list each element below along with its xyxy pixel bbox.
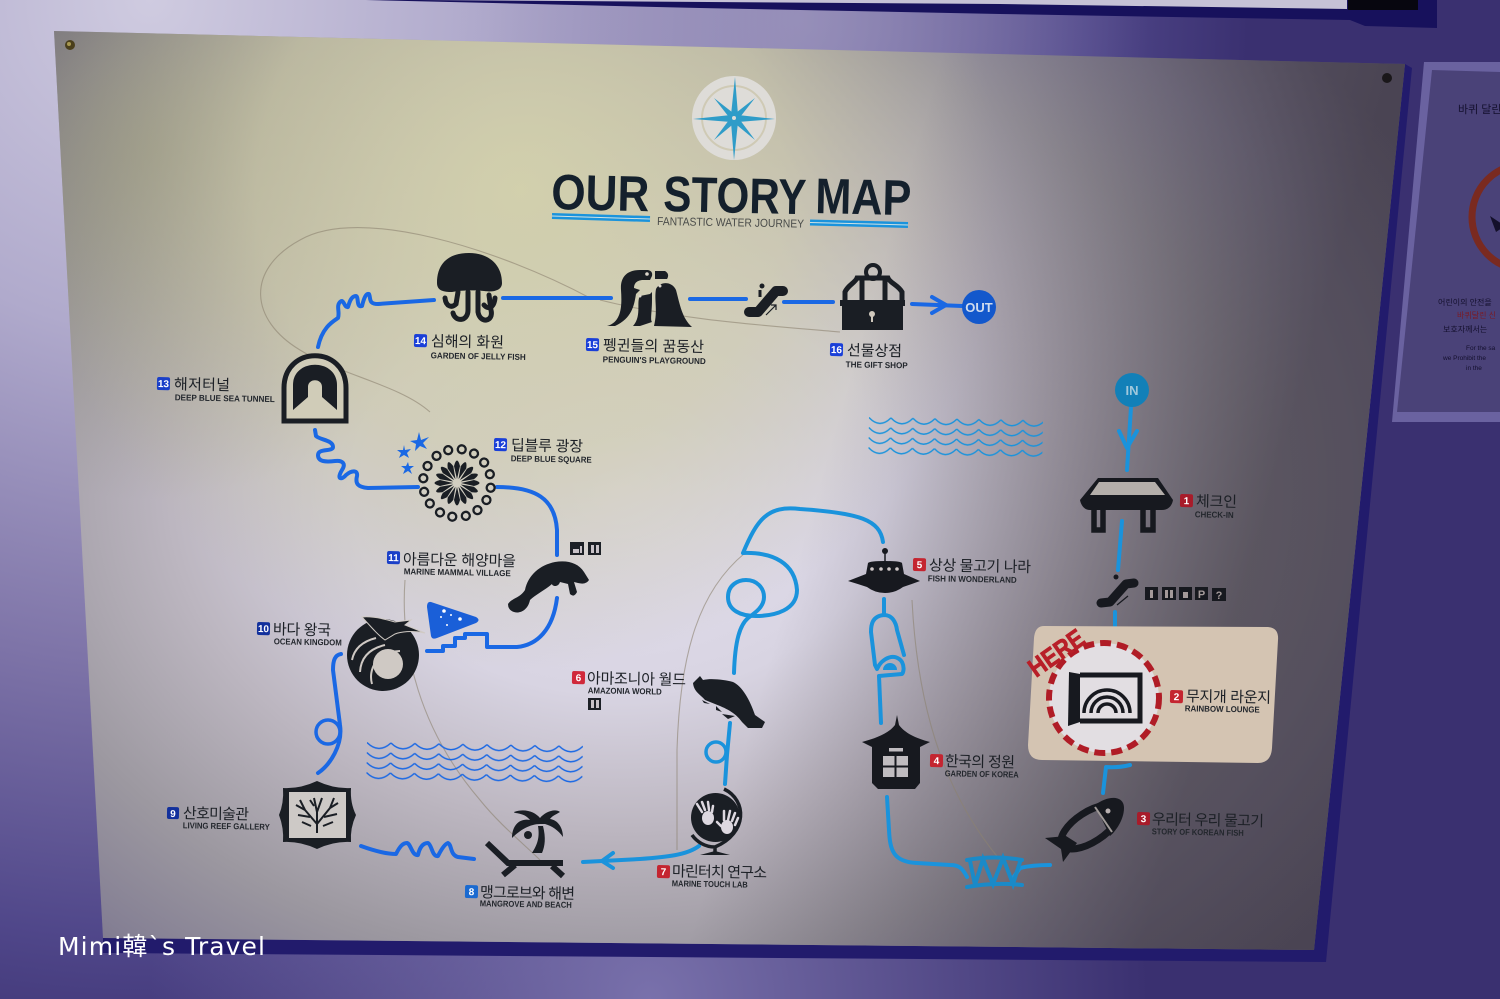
label 13 deep blue sea tunnel: DEEP BLUE SEA TUNNEL [175, 392, 275, 404]
neighbouring sign on the right: we Prohibit the [1442, 355, 1486, 362]
watermark: Mimi韓`s Travel [58, 932, 265, 961]
label 8 mangrove and beach: 맹그로브와 해변 [480, 884, 575, 903]
restroom icon under amazonia [588, 698, 601, 710]
label 10 ocean kingdom: 바다 왕국 [273, 621, 331, 639]
neighbouring sign on the right [1392, 62, 1500, 422]
title: OUR [551, 164, 650, 222]
label 3 korean fish: STORY OF KOREAN FISH [1152, 826, 1244, 838]
board shadow [103, 64, 1412, 962]
wave decoration: upper right [868, 416, 1043, 459]
neighbouring sign on the right: 바퀴달린 신 [1457, 310, 1496, 320]
icon: escalator upper [749, 284, 783, 315]
label 5 fish in wonderland: 상상 물고기 나라 [929, 557, 1031, 576]
icon: here badge: HERE [1022, 623, 1090, 683]
route: amazonia to marine lab [583, 723, 730, 868]
IN marker: IN [1126, 383, 1138, 398]
label 1 check-in: 1 [1184, 496, 1190, 507]
icon: deep blue square burst [419, 445, 495, 521]
label 15 penguin's playground: PENGUIN'S PLAYGROUND [603, 354, 706, 366]
here sticker [1022, 623, 1278, 763]
label 9 living reef gallery: LIVING REEF GALLERY [183, 820, 270, 832]
label 2 rainbow lounge: 2 [1174, 692, 1180, 703]
screws [65, 40, 1392, 83]
label 8 mangrove and beach: MANGROVE AND BEACH [480, 898, 572, 910]
neighbouring sign on the right: 어린이의 안전을 [1438, 297, 1492, 307]
label 7 marine touch lab: 7 [661, 867, 667, 878]
neighbouring sign on the right: 보호자께서는 [1443, 325, 1487, 334]
icon: blue triangle sign [427, 602, 478, 639]
label 12 deep blue square: 12 [495, 440, 507, 451]
icon: jellyfish [437, 253, 502, 320]
title underlines and subtitle [552, 216, 908, 231]
label 15 penguin's playground: 펭귄들의 꿈동산 [603, 337, 704, 356]
label 6 amazonia world [572, 670, 686, 697]
label 15 penguin's playground [586, 337, 706, 366]
icon: globe with hands [691, 789, 741, 855]
scratches on the board [261, 228, 1000, 860]
label 4 garden of korea [930, 753, 1019, 780]
wave decoration: lower left [366, 741, 583, 785]
label 3 korean fish: 3 [1141, 814, 1147, 825]
label 12 deep blue square: 딥블루 광장 [511, 437, 583, 456]
label 5 fish in wonderland: 5 [917, 560, 923, 571]
label 13 deep blue sea tunnel: 해저터널 [174, 376, 230, 394]
icon: gift bag [840, 265, 905, 330]
label 10 ocean kingdom [257, 621, 342, 647]
icon: reef gallery frame [279, 781, 356, 849]
icon: blue stars [397, 432, 429, 474]
icon: ocean kingdom shark wave [347, 617, 425, 691]
label 9 living reef gallery: 9 [170, 809, 176, 820]
icon: bridge [967, 858, 1022, 887]
icon: here badge [1022, 623, 1159, 753]
icon: manatee [508, 561, 589, 612]
label 11 marine mammal village: 아름다운 해양마을 [403, 551, 516, 570]
label 6 amazonia world: 아마조니아 월드 [587, 670, 686, 689]
label 6 amazonia world: AMAZONIA WORLD [588, 685, 662, 697]
route: wonderland to amazonia loop [728, 508, 883, 673]
title: STORY [663, 166, 807, 225]
label 9 living reef gallery: 산호미술관 [183, 805, 249, 823]
label 4 garden of korea: 한국의 정원 [945, 753, 1015, 771]
label 4 garden of korea: GARDEN OF KOREA [945, 768, 1019, 780]
neighbouring sign on the right: For the sa [1466, 345, 1496, 352]
icon: tunnel [284, 356, 346, 421]
label 11 marine mammal village: 11 [388, 553, 399, 564]
label 3 korean fish [1137, 811, 1264, 838]
label 3 korean fish: 우리터 우리 물고기 [1152, 811, 1264, 830]
label 14 garden of jelly fish: 심해의 화원 [431, 333, 504, 352]
icon: amazonia fish [693, 676, 765, 728]
title underlines and subtitle: FANTASTIC WATER JOURNEY [657, 216, 804, 231]
label 9 living reef gallery [167, 805, 270, 832]
label 14 garden of jelly fish: GARDEN OF JELLY FISH [431, 350, 526, 362]
label 8 mangrove and beach: 8 [469, 887, 475, 898]
label 13 deep blue sea tunnel [157, 376, 275, 404]
label 7 marine touch lab: MARINE TOUCH LAB [672, 878, 748, 890]
compass logo [692, 76, 776, 160]
label 1 check-in: 체크인 [1196, 493, 1237, 511]
label 5 fish in wonderland: FISH IN WONDERLAND [928, 573, 1017, 585]
label 8 mangrove and beach [465, 884, 575, 910]
icon: korean fish [1045, 796, 1126, 862]
label 7 marine touch lab [657, 863, 767, 890]
route: entrance to fish in wonderland [871, 407, 1137, 878]
OUT marker: OUT [965, 300, 993, 315]
label 16 the gift shop [830, 342, 908, 370]
icon: escalator lower [1101, 574, 1134, 605]
label 11 marine mammal village: MARINE MAMMAL VILLAGE [404, 566, 511, 578]
label 2 rainbow lounge: 무지개 라운지 [1186, 688, 1271, 707]
label 10 ocean kingdom: OCEAN KINGDOM [274, 636, 342, 647]
facility icons near escalator: P [1198, 589, 1205, 601]
label 4 garden of korea: 4 [934, 756, 940, 767]
restroom icons near manatee [570, 542, 601, 555]
neighbouring sign on the right: in the [1466, 365, 1482, 372]
label 7 marine touch lab: 마린터치 연구소 [672, 863, 767, 882]
title [551, 164, 912, 226]
label 2 rainbow lounge [1170, 688, 1271, 715]
label 16 the gift shop: 16 [831, 345, 843, 356]
label 14 garden of jelly fish: 14 [415, 336, 427, 347]
route: left side blue sections [315, 294, 962, 859]
icon: penguins [607, 270, 692, 327]
label 14 garden of jelly fish [414, 333, 526, 362]
OUT marker [962, 290, 996, 324]
label 13 deep blue sea tunnel: 13 [158, 379, 170, 390]
label 6 amazonia world: 6 [576, 673, 582, 684]
label 12 deep blue square: DEEP BLUE SQUARE [511, 453, 592, 465]
label 1 check-in [1180, 493, 1237, 520]
facility icons near escalator [1145, 587, 1226, 602]
label 15 penguin's playground: 15 [587, 340, 599, 351]
label 5 fish in wonderland [913, 557, 1031, 585]
label 16 the gift shop: 선물상점 [847, 342, 902, 360]
label 1 check-in: CHECK-IN [1195, 509, 1234, 520]
icon: ufo [848, 548, 920, 593]
label 10 ocean kingdom: 10 [258, 624, 270, 635]
icon: check-in desk [1080, 478, 1173, 530]
label 2 rainbow lounge: RAINBOW LOUNGE [1185, 703, 1260, 715]
icon: korean pavilion [862, 715, 930, 789]
label 11 marine mammal village [387, 551, 516, 578]
title: MAP [815, 168, 912, 226]
label 16 the gift shop: THE GIFT SHOP [846, 359, 908, 370]
icon: palm and beach lounger [487, 810, 563, 876]
facility icons near escalator: ? [1216, 590, 1223, 602]
label 12 deep blue square [494, 437, 592, 465]
top edge strip [366, 0, 1437, 28]
IN marker [1115, 373, 1149, 407]
